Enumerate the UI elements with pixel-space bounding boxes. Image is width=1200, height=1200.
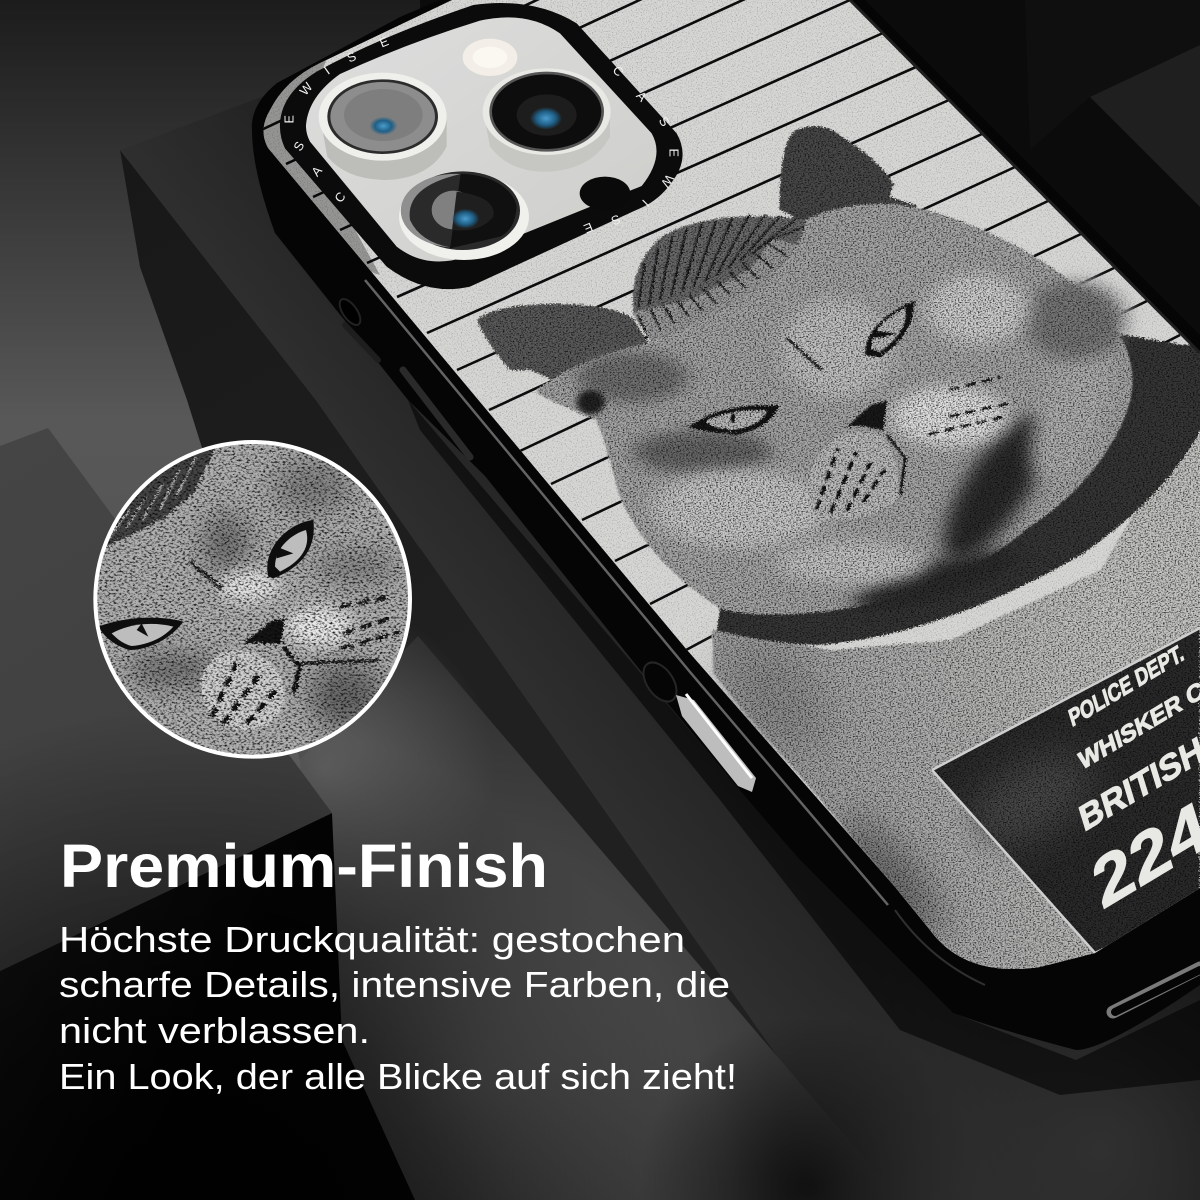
heading: Premium-Finish bbox=[60, 832, 548, 900]
brand ring text: A bbox=[633, 89, 650, 105]
nose bbox=[243, 618, 285, 643]
silver side key bbox=[676, 695, 756, 792]
brand ring text: C bbox=[610, 63, 626, 79]
detail magnifier circle bbox=[87, 433, 420, 767]
cat illustration bbox=[477, 126, 1200, 975]
body copy: Ein Look, der alle Blicke auf sich zieht! bbox=[59, 1056, 737, 1097]
microphone hole bbox=[580, 177, 630, 210]
ear: left bbox=[477, 304, 652, 381]
plate text: BRITISH bbox=[1075, 730, 1200, 840]
brand ring text: E bbox=[378, 34, 391, 50]
head shading bbox=[928, 406, 1048, 563]
lens: upper right bbox=[483, 68, 611, 172]
eye: right bbox=[866, 300, 915, 357]
body copy: Höchste Druckqualität: gestochen bbox=[59, 919, 685, 960]
magnified cat face bbox=[97, 444, 408, 755]
brand ring text: W bbox=[297, 80, 316, 98]
brand ring text: I bbox=[639, 197, 652, 209]
clear window bbox=[306, 17, 657, 262]
brand ring text: S bbox=[609, 211, 622, 228]
brand ring text: C bbox=[332, 189, 349, 205]
phone case body bbox=[252, 0, 1200, 1050]
body copy: nicht verblassen. bbox=[59, 1010, 370, 1051]
police name plate bbox=[932, 628, 1200, 953]
brand ring text: W bbox=[658, 172, 676, 190]
head bbox=[535, 204, 1133, 615]
brand ring text: E bbox=[582, 220, 595, 236]
wall stripes bbox=[259, 0, 1200, 650]
plate text: WHISKER CI bbox=[1076, 672, 1200, 775]
body copy: scharfe Details, intensive Farben, die bbox=[59, 964, 730, 1005]
camera ring bbox=[280, 3, 683, 289]
flash bbox=[463, 39, 517, 76]
plate text bbox=[1066, 639, 1200, 925]
lens: upper left bbox=[319, 73, 447, 180]
hat bbox=[632, 214, 806, 342]
whisker marks bbox=[340, 597, 400, 648]
brand ring text: S bbox=[345, 49, 358, 66]
nose bbox=[846, 400, 887, 431]
muzzle bbox=[808, 432, 905, 519]
brand ring text: A bbox=[309, 163, 325, 179]
hat fragment bbox=[106, 448, 217, 548]
ear: right bbox=[780, 126, 917, 227]
circle border bbox=[95, 442, 410, 757]
printed back: mugshot wall bbox=[250, 0, 1200, 1000]
collar bbox=[717, 334, 1200, 645]
muzzle bbox=[200, 649, 287, 732]
whiskers bbox=[929, 377, 1015, 434]
lens: bottom bbox=[399, 171, 529, 260]
body copy bbox=[59, 919, 737, 1097]
side buttons bbox=[336, 296, 756, 792]
brand ring text: S bbox=[656, 114, 672, 129]
eye: upper bbox=[267, 520, 314, 578]
brand ring text bbox=[282, 34, 680, 236]
phone shadow bbox=[408, 400, 1200, 1095]
brand ring text: E bbox=[666, 148, 680, 157]
eye: left bbox=[689, 405, 780, 434]
camera island bbox=[280, 3, 683, 289]
brand ring text: I bbox=[322, 64, 332, 77]
plate text: 224 bbox=[1084, 786, 1200, 925]
charging port bbox=[1113, 968, 1200, 1012]
brand ring text: E bbox=[282, 115, 296, 124]
corner shade bbox=[264, 60, 380, 275]
shading bbox=[273, 460, 353, 513]
brand ring text: S bbox=[291, 139, 307, 153]
sweater bbox=[712, 400, 1200, 975]
eye: lower bbox=[98, 618, 183, 650]
case edge highlights bbox=[365, 0, 1200, 985]
